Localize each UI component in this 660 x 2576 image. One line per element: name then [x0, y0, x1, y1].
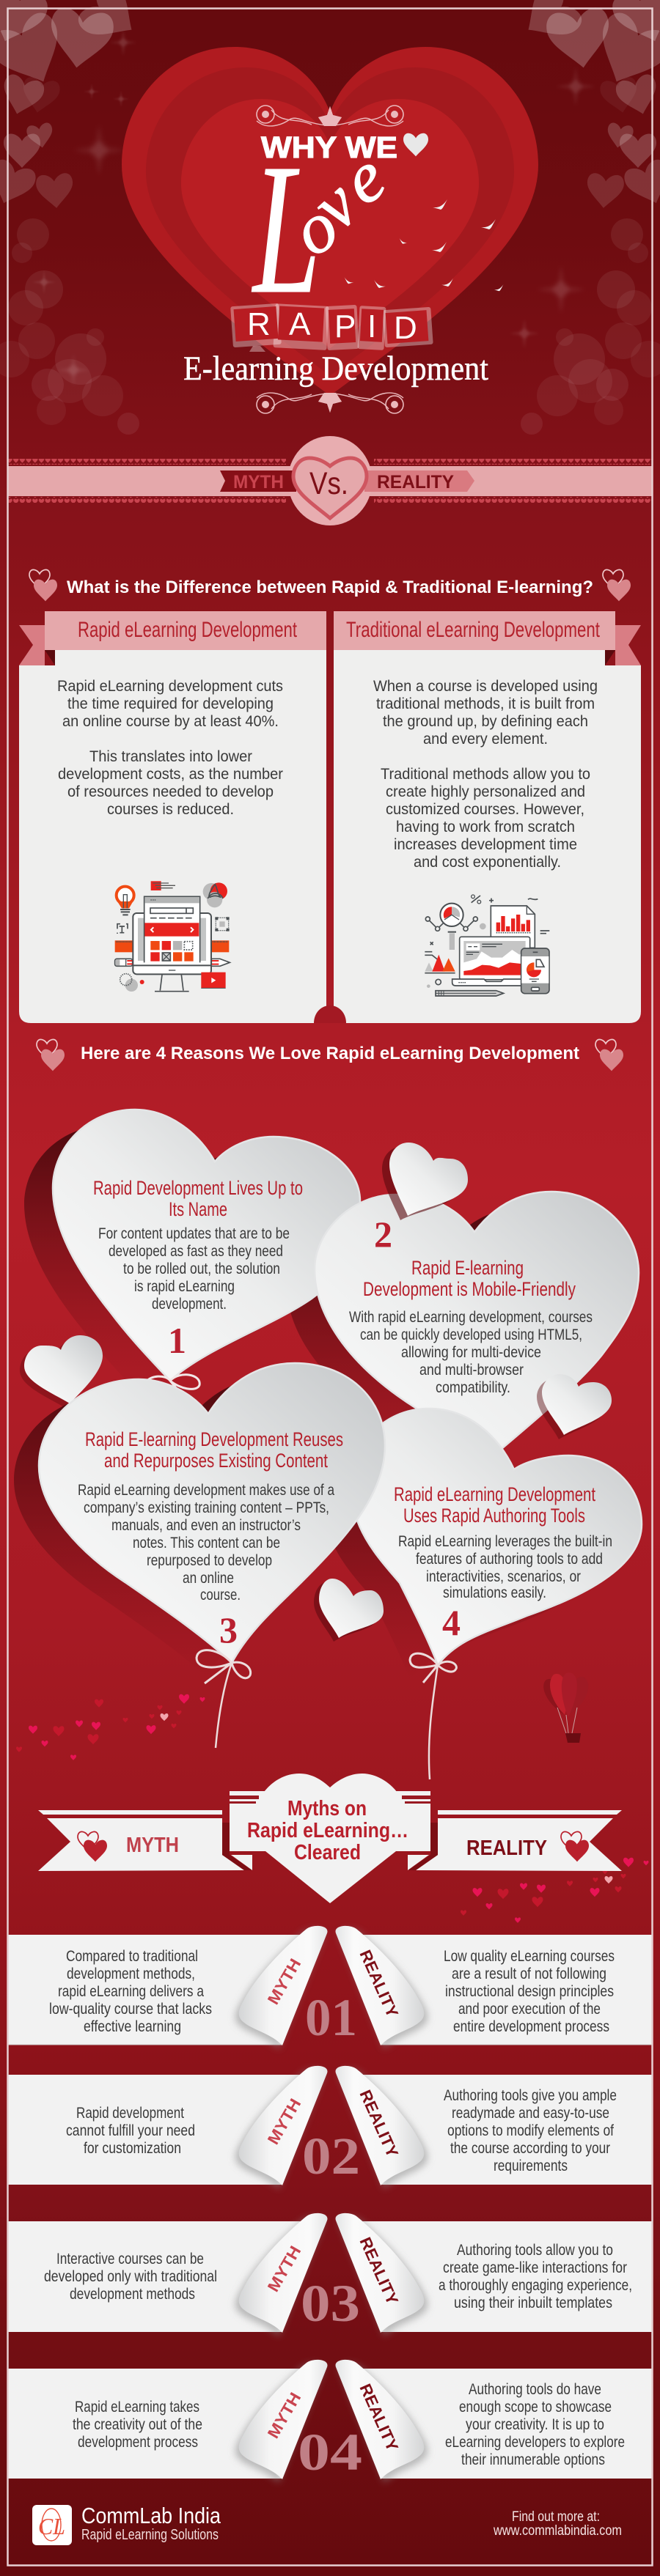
myth row 3: MYTH [264, 2243, 304, 2295]
myth row 4: Authoring tools do have [469, 2380, 601, 2398]
heart 1: to be rolled out, the solution [123, 1260, 280, 1277]
heart 4: Rapid eLearning leverages the built-in [398, 1532, 612, 1550]
myths cleared heart: Myths on [287, 1797, 367, 1820]
heart 2: With rapid eLearning development, courses [349, 1308, 593, 1326]
heart 3 [39, 1363, 385, 1663]
myth row 2: for customization [84, 2139, 181, 2157]
heading: difference: What is the Difference between Rapid & Traditional E-learning? [67, 577, 593, 597]
myth row 1: Low quality eLearning courses [444, 1947, 615, 1965]
rapid body text: the time required for developing [67, 695, 274, 712]
traditional body text: create highly personalized and [386, 783, 585, 800]
small heart left [20, 1335, 103, 1408]
panel: rapid elearning: Rapid eLearning Development [78, 618, 297, 642]
heart 3: an online [183, 1569, 234, 1587]
small heart centre [314, 1579, 384, 1642]
rapid body text [57, 677, 283, 818]
traditional body text: increases development time [394, 835, 577, 853]
traditional body text [373, 677, 598, 871]
heart 2: and multi-browser [419, 1361, 524, 1379]
myth row 1: MYTH [264, 1955, 304, 2008]
rapid device tiles: I [367, 309, 376, 344]
footer brand text: Rapid eLearning Solutions [81, 2527, 219, 2543]
heart 4: Uses Rapid Authoring Tools [403, 1505, 585, 1527]
myth row 1: are a result of not following [452, 1965, 606, 1982]
heart 3: 3 [219, 1609, 238, 1650]
heart 3: notes. This content can be [133, 1534, 280, 1551]
myth vs reality banner: REALITY [377, 472, 454, 492]
myth row 1: rapid eLearning delivers a [58, 1982, 204, 2000]
heart 3: repurposed to develop [147, 1551, 272, 1569]
myth row 1 [7, 1926, 653, 2049]
myth vs reality banner: MYTH [233, 472, 284, 492]
myth row 2: cannot fulfill your need [66, 2122, 195, 2139]
traditional body text: and cost exponentially. [414, 853, 561, 871]
heart 3: course. [200, 1586, 241, 1603]
heading: four reasons [37, 1039, 623, 1071]
myth row 1: instructional design principles [445, 1982, 614, 2000]
heart 3: Rapid E-learning Development Reuses [85, 1428, 343, 1450]
reality ribbon: REALITY [466, 1837, 547, 1860]
panel notch [314, 1005, 346, 1023]
myth row 3: development methods [70, 2285, 195, 2303]
myth row 1: low-quality course that lacks [49, 2000, 212, 2018]
rapid body text: development costs, as the number [58, 765, 283, 783]
rapid device tiles: D [394, 310, 417, 346]
heart 2: can be quickly developed using HTML5, [360, 1326, 582, 1343]
myth row 2: options to modify elements of [447, 2122, 614, 2139]
myth row 3: developed only with traditional [44, 2267, 217, 2285]
myth row 2: the course according to your [450, 2139, 610, 2157]
rapid body text: of resources needed to develop [67, 783, 274, 800]
heart 4: interactivities, scenarios, or [426, 1568, 581, 1585]
footer logo [32, 2505, 72, 2545]
myth row 4: the creativity out of the [73, 2416, 202, 2433]
myth row 3: Interactive courses can be [56, 2250, 204, 2267]
heart 1 [53, 1110, 360, 1381]
myth row 1: entire development process [453, 2018, 609, 2035]
heart 4 shadow [323, 1423, 614, 1680]
myth ribbon [38, 1810, 252, 1871]
myth row 2: Rapid development [76, 2104, 184, 2122]
myth row 4: development process [78, 2433, 198, 2451]
heart 1: For content updates that are to be [98, 1225, 290, 1242]
heart 3: manuals, and even an instructor’s [111, 1516, 301, 1534]
bows and strings [197, 1650, 456, 1779]
panel: traditional elearning [334, 611, 641, 1023]
heart 4: simulations easily. [443, 1584, 546, 1601]
title: why we: WHY WE [261, 130, 397, 164]
rapid device tiles: R [247, 306, 271, 342]
confetti hearts [16, 1694, 648, 1923]
rapid device tiles: P [334, 309, 356, 344]
myth row 4: MYTH [264, 2389, 304, 2442]
myth row 4: Rapid eLearning takes [75, 2398, 199, 2416]
title: love: ove [280, 136, 399, 272]
title: love: L [252, 126, 320, 333]
myth row 2: 02 [302, 2127, 360, 2185]
rapid device tiles [230, 303, 433, 352]
myth row 4 [7, 2360, 653, 2483]
myths cleared heart: Cleared [294, 1841, 361, 1864]
heart 1: developed as fast as they need [109, 1242, 283, 1260]
myth row 2 [7, 2066, 653, 2189]
myth row 1: and poor execution of the [458, 2000, 601, 2018]
myths cleared heart [230, 1774, 430, 1903]
heart 1: development. [152, 1295, 227, 1313]
myth row 4: REALITY [356, 2381, 402, 2454]
panel: rapid elearning [19, 611, 326, 1023]
traditional body text: traditional methods, it is built from [376, 695, 595, 712]
myth row 2: MYTH [264, 2095, 304, 2147]
rapid body text: This translates into lower [89, 748, 252, 765]
heading: four reasons: Here are 4 Reasons We Love Rapid eLearning Development [81, 1044, 579, 1063]
title: e-learning development: E-learning Development [183, 350, 488, 388]
heart 1: Rapid Development Lives Up to [93, 1177, 303, 1199]
heart 1: is rapid eLearning [134, 1277, 235, 1295]
myth row 4: enough scope to showcase [459, 2398, 612, 2416]
heart 2: Rapid E-learning [411, 1257, 524, 1279]
heart 4 [351, 1409, 642, 1665]
rapid device tiles: A [289, 306, 311, 342]
myth row 3: 03 [301, 2274, 360, 2333]
hot air balloon [543, 1672, 588, 1743]
footer link [493, 2509, 622, 2539]
footer link: www.commlabindia.com [493, 2523, 622, 2539]
icon: analytics laptop [425, 895, 549, 996]
birds [345, 199, 503, 291]
heart 4: 4 [442, 1602, 461, 1643]
footer logo: CL [38, 2513, 65, 2539]
heart 3 shadow [14, 1378, 360, 1678]
heart 4: Rapid eLearning Development [394, 1483, 595, 1505]
myths cleared heart: Rapid eLearning… [247, 1819, 408, 1842]
myth row 2: REALITY [356, 2087, 402, 2160]
myth row 1: effective learning [84, 2018, 181, 2035]
heart shadows [24, 1126, 611, 1493]
footer brand text: CommLab India [81, 2503, 221, 2528]
title heart [122, 47, 538, 396]
traditional body text: customized courses. However, [386, 800, 584, 818]
ornament bottom [257, 393, 403, 413]
traditional body text: and every element. [423, 730, 548, 748]
myth row 4: their innumerable options [461, 2451, 605, 2468]
myth vs reality banner: Vs. [309, 466, 348, 501]
decorative hearts and bokeh [0, 0, 660, 435]
traditional body text: When a course is developed using [373, 677, 598, 695]
heart 3: and Repurposes Existing Content [104, 1450, 328, 1472]
myth row 1: Compared to traditional [66, 1947, 198, 1965]
myth row 2: requirements [494, 2157, 568, 2174]
rapid body text: an online course by at least 40%. [62, 712, 279, 730]
heart 2 [315, 1192, 639, 1477]
heart 4: features of authoring tools to add [416, 1550, 603, 1568]
bow 1 [147, 1375, 199, 1392]
myth row 1: development methods, [67, 1965, 195, 1982]
reality ribbon [408, 1810, 622, 1871]
traditional body text: having to work from scratch [396, 818, 575, 835]
heart 3: company’s existing training content – PPTs, [84, 1499, 329, 1516]
footer brand text [81, 2503, 221, 2543]
myth row 1: REALITY [356, 1947, 402, 2020]
icon: title heart [403, 133, 428, 156]
heart 2: allowing for multi-device [401, 1343, 541, 1361]
traditional body text: the ground up, by defining each [383, 712, 588, 730]
small heart right [537, 1374, 612, 1439]
heading: difference [29, 569, 631, 601]
heart 3: Rapid eLearning development makes use of a [78, 1481, 334, 1499]
myth row 2: readymade and easy-to-use [452, 2104, 609, 2122]
footer link: Find out more at: [512, 2509, 600, 2525]
myth row 3: Authoring tools allow you to [457, 2241, 613, 2259]
ornament top [257, 106, 403, 126]
heart 2: Development is Mobile-Friendly [363, 1278, 576, 1300]
heart 2: compatibility. [436, 1379, 510, 1396]
myth ribbon: MYTH [126, 1834, 179, 1857]
myth row 3: using their inbuilt templates [454, 2294, 612, 2311]
icon: web design monitor [115, 881, 230, 992]
heart 2: 2 [374, 1214, 392, 1255]
myth vs reality banner [7, 436, 653, 525]
myth row 4: your creativity. It is up to [466, 2416, 604, 2433]
myth row 3: REALITY [356, 2234, 402, 2308]
myth row 4: 04 [298, 2423, 362, 2481]
myth row 2: Authoring tools give you ample [444, 2086, 617, 2104]
traditional body text: Traditional methods allow you to [381, 765, 590, 783]
myth row 3 [7, 2213, 653, 2336]
rapid body text: courses is reduced. [107, 800, 234, 818]
myth row 1: 01 [305, 1988, 357, 2047]
small heart top [382, 1143, 468, 1220]
rapid body text: Rapid eLearning development cuts [57, 677, 283, 695]
heart 1: 1 [168, 1320, 186, 1361]
heart 1: Its Name [169, 1198, 227, 1220]
